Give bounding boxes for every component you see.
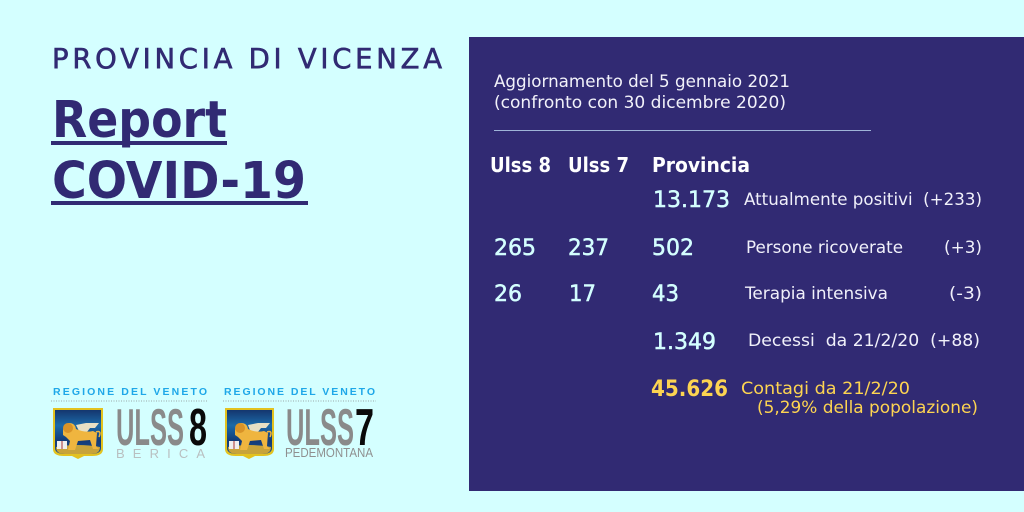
text: update date	[494, 72, 790, 113]
logo: ulss 8 berica	[51, 386, 208, 461]
column headers	[490, 153, 750, 177]
row: persone ricoverate: (+3)	[944, 238, 982, 258]
icon: lion shield	[53, 408, 103, 459]
logo: ulss 8 berica: ULSS	[116, 399, 184, 457]
row: terapia intensiva: 17	[569, 282, 596, 307]
text: update date: Aggiornamento del 5 gennaio 2021	[494, 72, 790, 92]
text: update date: (confronto con 30 dicembre 2020)	[494, 93, 786, 113]
row: persone ricoverate: 265	[494, 236, 536, 261]
title: report covid-19	[51, 91, 308, 211]
column headers: Ulss 7	[568, 153, 629, 177]
row: terapia intensiva: Terapia intensiva	[744, 284, 888, 304]
row: contagi: Contagi da 21/2/20	[741, 379, 910, 399]
row: attualmente positivi	[653, 188, 982, 213]
row: persone ricoverate: 237	[568, 236, 609, 261]
title: report covid-19: COVID-19	[52, 152, 306, 211]
row: decessi: 1.349	[653, 330, 716, 355]
row: decessi: Decessi da 21/2/20 (+88)	[748, 331, 980, 351]
column headers: Ulss 8	[490, 153, 551, 177]
heading: provincia di vicenza: PROVINCIA DI VICENZA	[52, 43, 442, 75]
row: decessi	[653, 330, 980, 355]
row: terapia intensiva: 26	[494, 282, 522, 307]
logo: ulss 8 berica: 8	[189, 399, 207, 457]
row: persone ricoverate: 502	[652, 236, 694, 261]
logo: ulss 7 pedemontana: REGIONE DEL VENETO	[224, 386, 375, 398]
logo: ulss 7 pedemontana: ULSS	[286, 399, 354, 457]
logo: ulss 8 berica: REGIONE DEL VENETO	[53, 386, 207, 398]
row: persone ricoverate: Persone ricoverate	[746, 238, 903, 258]
logo: ulss 7 pedemontana: 7	[355, 399, 374, 457]
title: report covid-19: Report	[52, 91, 227, 150]
row: terapia intensiva	[494, 282, 982, 307]
logo: ulss 7 pedemontana	[223, 386, 376, 460]
row: contagi: (5,29% della popolazione)	[757, 398, 978, 418]
column headers: Provincia	[652, 153, 750, 177]
row: attualmente positivi: Attualmente positivi (+233)	[744, 190, 982, 210]
row: persone ricoverate	[494, 236, 982, 261]
panel: data	[469, 37, 1024, 491]
row: terapia intensiva: (-3)	[949, 284, 982, 304]
row: contagi: 45.626	[651, 377, 728, 402]
row: contagi	[651, 377, 978, 418]
icon: lion shield	[225, 408, 274, 459]
row: attualmente positivi: 13.173	[653, 188, 730, 213]
logo: ulss 7 pedemontana: PEDEMONTANA	[285, 445, 373, 460]
row: terapia intensiva: 43	[652, 282, 679, 307]
logo: ulss 8 berica: BERICA	[116, 446, 205, 461]
